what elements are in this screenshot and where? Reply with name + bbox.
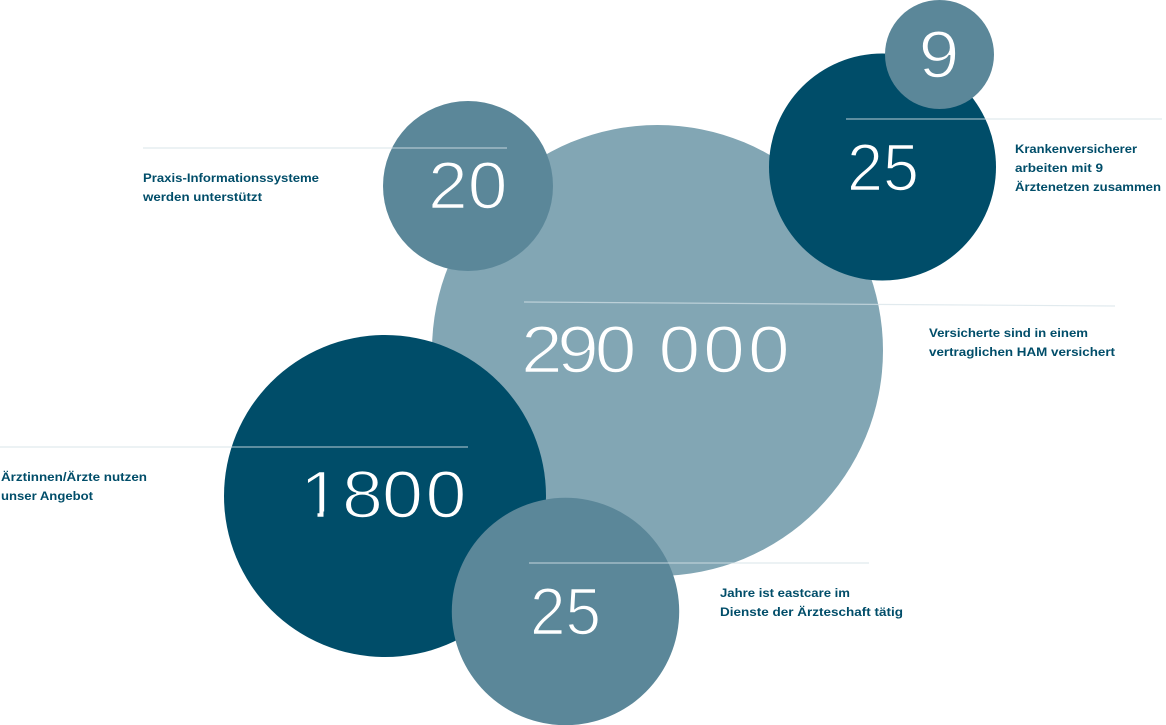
- number: 20: 20: [428, 148, 508, 224]
- panel: 20 practice systems: [142, 101, 553, 271]
- label: practice systems: [142, 171, 319, 204]
- number: 290 000: 290 000: [521, 313, 790, 388]
- label: insurers: [1015, 142, 1161, 194]
- panel: 290 000 insured: [432, 125, 1115, 576]
- label: insurers: Krankenversicherer: [1015, 142, 1137, 156]
- label: insurers: Ärztenetzen zusammen: [1015, 179, 1161, 194]
- label: practice systems: Praxis-Informationssysteme: [143, 171, 319, 185]
- label: physicians: [1, 469, 147, 503]
- label: insurers: arbeiten mit 9: [1015, 161, 1103, 175]
- panel: 9 physician networks: [885, 0, 994, 109]
- label: insured: Versicherte sind in einem: [929, 326, 1088, 340]
- label: years: [720, 586, 903, 619]
- panel: 1 800 physicians: [0, 335, 546, 657]
- label: years: Dienste der Ärzteschaft tätig: [720, 604, 903, 619]
- panel: 25 years: [452, 498, 903, 725]
- label: physicians: unser Angebot: [1, 489, 93, 503]
- number: 25 years: 25: [530, 574, 601, 650]
- number: 1 800: 1 800: [300, 457, 466, 532]
- label: insured: [929, 326, 1115, 359]
- label: practice systems: werden unterstützt: [142, 190, 262, 204]
- number: 25 insurers: 25: [847, 130, 919, 206]
- circle: 25 insurers: [769, 54, 996, 280]
- label: years: Jahre ist eastcare im: [720, 586, 850, 600]
- circle: 290 000: [432, 125, 883, 576]
- label: physicians: Ärztinnen/Ärzte nutzen: [1, 469, 147, 484]
- number: 9: 9: [918, 18, 960, 92]
- label: insured: vertraglichen HAM versichert: [929, 345, 1115, 359]
- panel: 25 health insurers: [769, 54, 1162, 280]
- circle: 20: [383, 101, 553, 271]
- circle: 9: [885, 0, 994, 109]
- circle: 25 years: [452, 498, 679, 725]
- circle: 1 800: [224, 335, 546, 657]
